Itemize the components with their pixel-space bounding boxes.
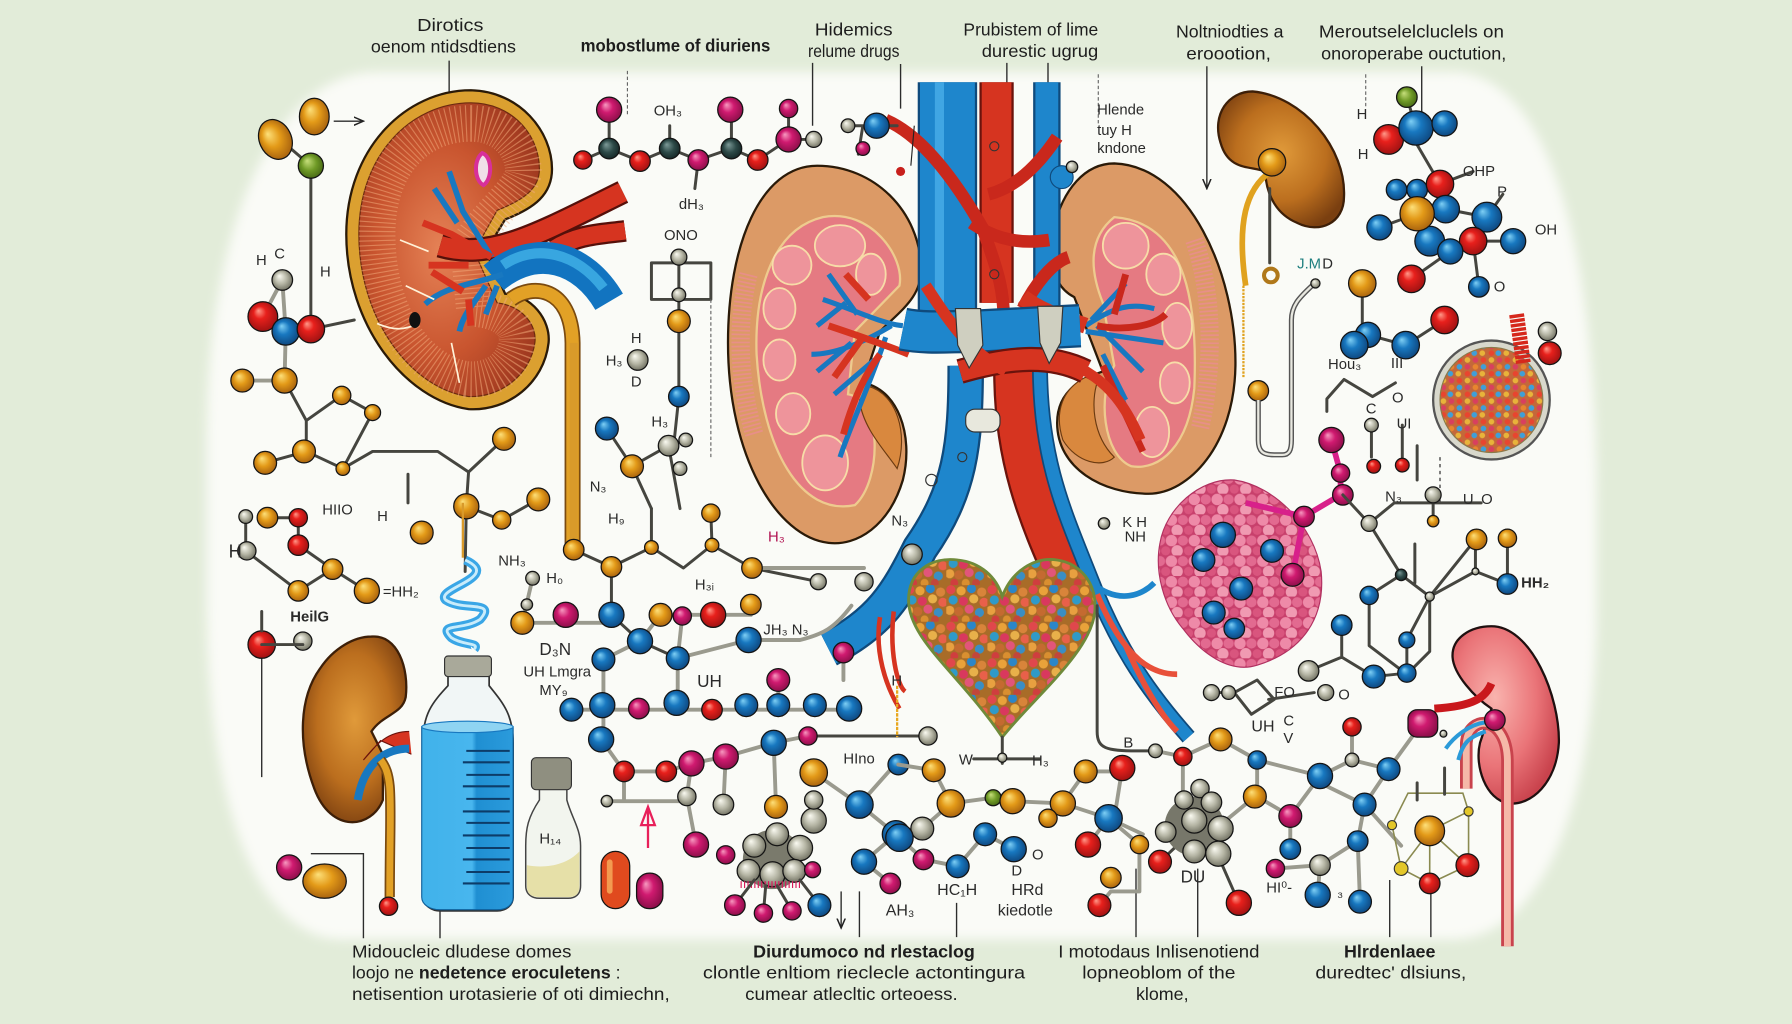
inner pink medulla [756,216,900,506]
caption: bottom centre: clontle enltiom rieclecle actontingura [703,962,1026,982]
labels [1274,490,1549,703]
labels: O [1481,492,1493,508]
labels: HH₂ [1521,575,1549,591]
grey cluster [1155,779,1233,866]
atom labels: H [377,509,388,525]
labels: AH₃ [886,902,914,919]
atom labels [229,246,526,626]
renal arteries [440,192,623,250]
inner vessels [425,171,503,331]
labels: HRd [1011,882,1043,899]
labels: C [1366,402,1377,418]
icon: water bottle [422,656,513,911]
labels [891,674,1049,770]
labels: D [1011,863,1022,879]
labels: U [1463,492,1474,508]
labels [590,331,785,546]
caption: bottom right: duredtec' dlsiuns, [1315,962,1466,982]
labels: Hou₃ [1328,357,1361,373]
vessels [1434,683,1491,709]
kidney: lower left brown [277,636,411,915]
labels: Hlende [1097,102,1144,118]
caption: bottom left [352,942,670,1004]
caption: bottom left: loojo ne nedetence eroculetens : [352,962,621,982]
tube with gold ball: J.M [1297,257,1321,273]
molecule: right hexagon [1203,487,1549,714]
atom labels: H [229,541,242,562]
labels: DU [1181,866,1205,886]
caption: bottom centre right: klome, [1136,984,1189,1004]
labels: UI [1397,417,1411,433]
labels: D₃N [539,639,571,659]
labels: P [1497,185,1507,201]
atom labels: =HH₂ [383,585,419,601]
outer [1052,163,1235,494]
caption: bottom centre right: lopneoblom of the [1082,962,1235,982]
aorta [982,82,1012,303]
labels: O [1338,687,1350,703]
kidney: upper right brown [1218,91,1344,377]
labels: NH [1125,530,1146,546]
labels: O [1032,847,1044,863]
icon: pills [601,807,663,909]
caption: diuretics: Dirotics [417,15,483,35]
labels: OH [1535,222,1557,238]
labels: C [1283,714,1294,730]
renal vein [494,258,609,302]
caption: bottom centre: cumear atlecltic orteoess. [745,984,958,1004]
labels: UH [697,671,722,691]
labels: tuy H [1097,123,1132,139]
molecule: octagon with yellow nodes [1387,768,1479,894]
vessels [811,274,903,457]
lower tan lobe [1059,377,1114,463]
molecule: grey atom cluster [717,791,831,922]
cell clump [1158,480,1322,667]
caption: diuretic drug [963,19,1098,61]
labels: H₃ [651,414,668,430]
labels: HI⁰- [1266,881,1292,897]
lower blue trunks [829,366,966,649]
molecule: centre column [590,249,785,546]
caption: relume drugs: relume drugs [808,41,899,61]
caption: bottom right [1315,942,1466,982]
labels: H [891,674,902,690]
labels: MY₉ [539,683,568,699]
labels: O [1494,279,1505,295]
bottom captions [352,942,1466,1004]
outer [728,166,921,543]
leader lines [262,61,1431,938]
labels: K H [1122,515,1147,531]
cap [445,656,491,677]
vessels [1086,283,1163,440]
labels [1357,107,1557,295]
molecule: top-left trio [252,98,363,329]
labels: V [1283,731,1293,747]
molecule: left network [229,246,550,658]
caption: erosion [1176,22,1284,63]
labels: kiedotle [998,902,1053,919]
labels: N₃ [590,479,606,495]
vessels: aorta and vena cava [829,82,1189,737]
labels: dH₃ [679,197,704,213]
atom labels: NH₃ [498,554,526,570]
icon: small vial [526,758,581,898]
labels: H₀ [546,571,563,587]
labels: OH₃ [654,103,682,119]
caption: diuretic drug: Prubistem of lime [963,19,1098,39]
labels [654,103,704,244]
labels: N₃ [1385,490,1402,506]
ureter [1466,723,1507,946]
tube with gold ball: D [1322,257,1333,273]
labels: UH Lmgra [523,665,592,681]
clamps [955,309,983,368]
labels: FO [1274,685,1295,701]
caption: molecular [1319,22,1506,63]
kidney: large left cross-section [346,90,625,549]
kidney cortex [359,103,539,397]
atom labels: H [256,253,267,269]
labels: JH₃ N₃ [763,622,809,638]
labels: W [959,753,973,769]
caption: bottom centre: Diurdumoco nd rlestaclog [753,942,975,962]
kidney: lower right pink [1408,626,1559,946]
labels: H₃ [1032,754,1049,770]
kidney: central left [728,166,921,543]
labels: kndone [1097,141,1146,157]
vena cava [921,82,973,326]
labels: III [1391,356,1403,372]
inner pink medulla [1093,217,1195,467]
labels: ₃ [1337,885,1343,901]
molecule: right middle [1327,270,1458,503]
lower red trunk [1015,371,1069,583]
labels: H₃ᵢ [695,578,714,594]
renal vein horizontal [903,326,1080,332]
caption: bottom centre right: I motodaus Inlisenotiend [1058,942,1259,962]
labels: H [1357,107,1367,123]
labels: HIno [843,751,875,767]
labels: H [1358,147,1368,163]
labels: UH [1251,718,1275,735]
scale ticks [463,751,510,883]
heart filled with colourful cells [808,560,1095,770]
labels [886,714,1343,919]
arterial branches [886,120,1069,326]
labels [1328,356,1411,433]
magenta chain and pink cell clump [1158,427,1353,667]
labels: H [631,331,642,347]
labels: H₃ [768,530,785,546]
atom labels: H [320,265,331,281]
atom labels: HeilG [290,610,329,626]
labels: B [1123,735,1133,751]
caption: erosion: Noltniodties a [1176,22,1284,42]
kidney: central right [1052,163,1235,494]
molecule: centre-left ring and rows [511,343,910,894]
caption: bottom centre [703,942,1026,1004]
labels: ONO [664,228,698,244]
caption: bottom left: netisention urotasierie of oti dimiechn, [352,984,670,1004]
icon: small vial: H₁₄ [539,831,561,847]
labels: OHP [1463,164,1495,180]
icon: blue helix [444,503,485,649]
caption: bottom centre right [1058,942,1259,1004]
molecule: top right [1357,87,1557,297]
atom labels: HIIO [322,502,353,518]
caption: mechanism: mobostlume of diuriens [581,35,770,55]
kidney body [346,90,552,409]
labels: H₉ [608,511,625,527]
caption: diuretics: oenom ntidsdtiens [371,37,516,57]
labels [891,102,1147,546]
caption: relume drugs: Hidemics [815,19,893,39]
labels: D [631,374,642,390]
labels: H₃ [606,354,622,370]
top captions [371,15,1506,63]
caption: diuretic drug: durestic ugrug [982,41,1098,61]
labels: HC₁H [937,882,977,899]
labels [523,571,875,767]
atom labels: C [274,246,285,262]
caption: erosion: eroootion, [1186,43,1271,63]
tube with gold ball [1248,257,1333,455]
white central panel [207,72,1597,939]
caption: bottom right: Hlrdenlaee [1344,942,1435,962]
labels: N₃ [891,514,908,530]
caption: molecular: onoroperabe ouctution, [1321,43,1506,63]
molecule: lower chain [886,606,1422,919]
caption: diuretics [371,15,516,57]
dish with colourful granules [1433,314,1561,459]
caption: bottom left: Midoucleic dludese domes [352,942,571,962]
lower tan lobe [859,386,902,469]
molecule: top vessel atom [841,113,914,176]
water [422,727,513,910]
labels: O [1392,390,1404,406]
renal artery horizontal [960,359,1086,371]
molecule: top centre zigzag [574,97,822,244]
red coil [1517,314,1523,363]
small ring [1211,680,1314,714]
caption: relume drugs [808,19,899,61]
ureter [511,291,573,549]
right vein [1035,82,1059,326]
caption: molecular: Meroutselelcluclels on [1319,22,1504,42]
